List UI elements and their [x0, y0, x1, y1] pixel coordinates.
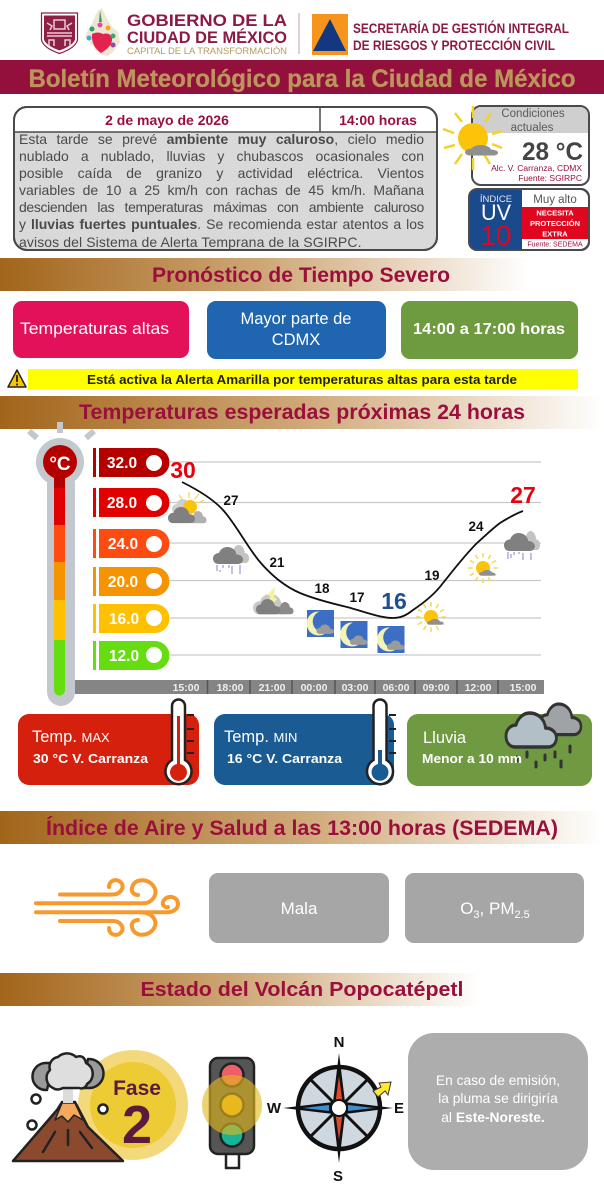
icon: moon 2: [340, 621, 368, 648]
card: pluma: [408, 1033, 588, 1170]
card: temp min: Temp. MIN: [224, 728, 297, 746]
card: horario: 14:00 a 17:00 horas: [413, 321, 565, 338]
icon: fase badge: [78, 1050, 188, 1160]
card: calidad del aire: [209, 873, 389, 943]
scale labels: 32.0: [107, 455, 137, 472]
temperature values: 16: [381, 588, 407, 614]
panel: current conditions: [443, 106, 589, 185]
heading: volcán: Estado del Volcán Popocatépetl: [140, 978, 464, 1001]
card: calidad del aire: Mala: [281, 899, 318, 918]
icon: fase badge: 2: [122, 1095, 152, 1155]
temperature values: 24: [468, 519, 484, 534]
chart: temperature forecast: [29, 422, 544, 706]
plume arrow: [373, 1082, 391, 1097]
icon: moon 1: [307, 610, 334, 637]
icon: sun 2: [468, 553, 498, 583]
card: zona: Mayor parte de: [241, 310, 351, 328]
card: contaminantes: O: [460, 899, 473, 918]
temperature values: 21: [269, 555, 285, 570]
card: contaminantes: [405, 873, 584, 943]
icon: thermometer cold: [367, 700, 396, 784]
header logos: [42, 8, 569, 57]
weather icons: [168, 492, 540, 653]
icon: sun with cloud: [443, 106, 502, 170]
heading: actuales: [511, 122, 554, 134]
time axis: [75, 680, 544, 694]
label: UV: [481, 200, 511, 225]
heading: volcán: [0, 973, 480, 1006]
compass letters: E: [394, 1100, 404, 1117]
compass letters: N: [334, 1034, 344, 1051]
thermometer scale: [29, 422, 94, 706]
text block: bulletin paragraph: y lluvias fuertes puntuales. Se recomienda estar atentos a los: [19, 216, 424, 232]
date: 2 de mayo de 2026: [105, 112, 229, 128]
heading: Condiciones: [501, 108, 565, 120]
card: contaminantes: 3: [473, 909, 480, 921]
scale labels: 20.0: [108, 574, 138, 591]
icon: wind: [36, 880, 178, 935]
temperature values: 27: [223, 493, 239, 508]
card: zona: [207, 301, 386, 359]
text: gobierno: GOBIERNO DE LA: [127, 12, 287, 30]
location: Fuente: SGIRPC: [518, 173, 582, 183]
text block: bulletin paragraph: variables de 10 a 25 km/h con rachas de 45 km/h. Mañana: [19, 182, 424, 198]
panel: bulletin text box: [14, 107, 437, 250]
heading: temperaturas: Temperaturas esperadas próximas 24 horas: [79, 400, 525, 424]
alert bar: Está activa la Alerta Amarilla por temperaturas altas para esta tarde: [87, 373, 517, 387]
temperature values: 30: [170, 457, 196, 483]
label: 10: [480, 220, 512, 251]
icon: thermometer hot: [166, 700, 194, 784]
temperature: 28 °C: [522, 138, 583, 166]
heading: [501, 108, 565, 134]
card: contaminantes: , PM: [480, 899, 515, 918]
time axis: 00:00: [301, 682, 328, 694]
card: temp max: [18, 700, 199, 785]
icon: moon 3: [377, 626, 404, 653]
card: temp min: 16 °C V. Carranza: [227, 752, 343, 766]
icon: traffic light: [202, 1058, 262, 1168]
title banner: Boletín Meteorológico para la Ciudad de México: [28, 65, 576, 93]
icon: volcano: [13, 1053, 123, 1161]
compass letters: [267, 1034, 404, 1185]
text: secretaría: DE RIESGOS Y PROTECCIÓN CIVIL: [353, 36, 555, 53]
temperature values: 18: [314, 581, 330, 596]
temperature values: 17: [349, 590, 365, 605]
heading: índice de aire: [0, 811, 604, 844]
icon: rain cloud: [213, 545, 249, 574]
temperature curve: [182, 482, 523, 618]
icon: fase badge: Fase: [113, 1077, 161, 1100]
card: temp max: Temp. MAX: [32, 728, 110, 746]
text: gobierno: [127, 12, 287, 47]
time axis: 18:00: [217, 682, 244, 694]
panel: UV index: [469, 189, 589, 251]
label: [480, 194, 512, 251]
scale labels: 24.0: [108, 536, 138, 553]
card: horario: [401, 301, 578, 359]
alert bar: [8, 369, 578, 389]
location: Alc. V. Carranza, CDMX: [491, 163, 582, 173]
warning: EXTRA: [542, 230, 568, 238]
card: contaminantes: 2.5: [515, 909, 530, 921]
time: 14:00 horas: [339, 112, 417, 128]
heading: pronóstico: [0, 258, 530, 291]
location: [491, 163, 582, 183]
time axis: 12:00: [465, 682, 492, 694]
icon: city crest: [42, 13, 78, 54]
icon: colorful map of the city: [85, 8, 120, 56]
time axis: 06:00: [383, 682, 410, 694]
icon: warning: [8, 370, 26, 387]
heading: pronóstico: Pronóstico de Tiempo Severo: [152, 263, 450, 287]
text block: bulletin paragraph: avisos del Sistema de Alerta Temprana de la SGIRPC.: [19, 234, 362, 250]
scale labels: 12.0: [109, 648, 139, 665]
card: temp min: [214, 700, 396, 785]
heading: temperaturas: [0, 396, 604, 429]
icon: civil protection triangle: [312, 14, 348, 55]
text: secretaría: SECRETARÍA DE GESTIÓN INTEGRAL: [353, 19, 569, 36]
icon: rain clouds: [506, 704, 581, 767]
time axis: 15:00: [173, 682, 200, 694]
text: capital de la transformación: CAPITAL DE LA TRANSFORMACIÓN: [127, 46, 287, 57]
temperature values: 27: [510, 482, 536, 508]
time axis: 03:00: [342, 682, 369, 694]
warning: PROTECCIÓN: [530, 219, 580, 228]
source: Fuente: SEDEMA: [527, 242, 583, 248]
text block: bulletin paragraph: Esta tarde se prevé ambiente muy caluroso, cielo medio: [19, 131, 424, 147]
compass letters: S: [333, 1168, 343, 1185]
heading: índice de aire: Índice de Aire y Salud a las 13:00 horas (SEDEMA): [46, 815, 558, 840]
text block: bulletin paragraph: posible caída de granizo y actividad eléctrica. Vientos: [19, 165, 424, 181]
temperature values: [170, 457, 536, 614]
temperature values: 19: [424, 568, 440, 583]
icon: compass: [267, 1034, 404, 1185]
text block: bulletin paragraph: descienden las temperaturas máximas con ambiente caluroso: [19, 199, 424, 215]
thermometer scale: °C: [49, 454, 71, 475]
label: ÍNDICE: [480, 194, 512, 205]
card: pluma: En caso de emisión,: [436, 1073, 560, 1088]
icon: rain cloud 2: [504, 531, 540, 560]
text: gobierno: CIUDAD DE MÉXICO: [127, 28, 287, 47]
text block: bulletin paragraph: [19, 131, 424, 250]
text: secretaría: [353, 19, 569, 53]
scale labels: 16.0: [109, 611, 139, 628]
card: temp max: 30 °C V. Carranza: [33, 752, 149, 766]
scale labels: 28.0: [107, 495, 137, 512]
time axis: 15:00: [510, 682, 537, 694]
card: lluvia: Menor a 10 mm: [422, 752, 522, 766]
scale labels: [93, 448, 170, 670]
level: Muy alto: [533, 194, 577, 206]
icon: partly cloudy: [168, 492, 206, 523]
card: lluvia: [407, 704, 592, 786]
card: temperaturas altas: Temperaturas altas: [20, 319, 169, 338]
compass letters: W: [267, 1100, 282, 1117]
icon: storm cloud: [253, 587, 294, 614]
icon: sun 1: [416, 602, 446, 632]
card: temperaturas altas: [13, 301, 189, 358]
text block: bulletin paragraph: nublado a nublado, lluvias y chubascos ocasionales con: [19, 148, 424, 164]
time axis: 09:00: [423, 682, 450, 694]
warning: [522, 207, 588, 239]
warning: NECESITA: [536, 208, 574, 218]
card: pluma: al Este-Noreste.: [441, 1110, 545, 1125]
card: lluvia: Lluvia: [423, 729, 467, 747]
card: zona: CDMX: [272, 331, 320, 349]
card: pluma: la pluma se dirigiría: [438, 1091, 558, 1106]
time axis: 21:00: [259, 682, 286, 694]
